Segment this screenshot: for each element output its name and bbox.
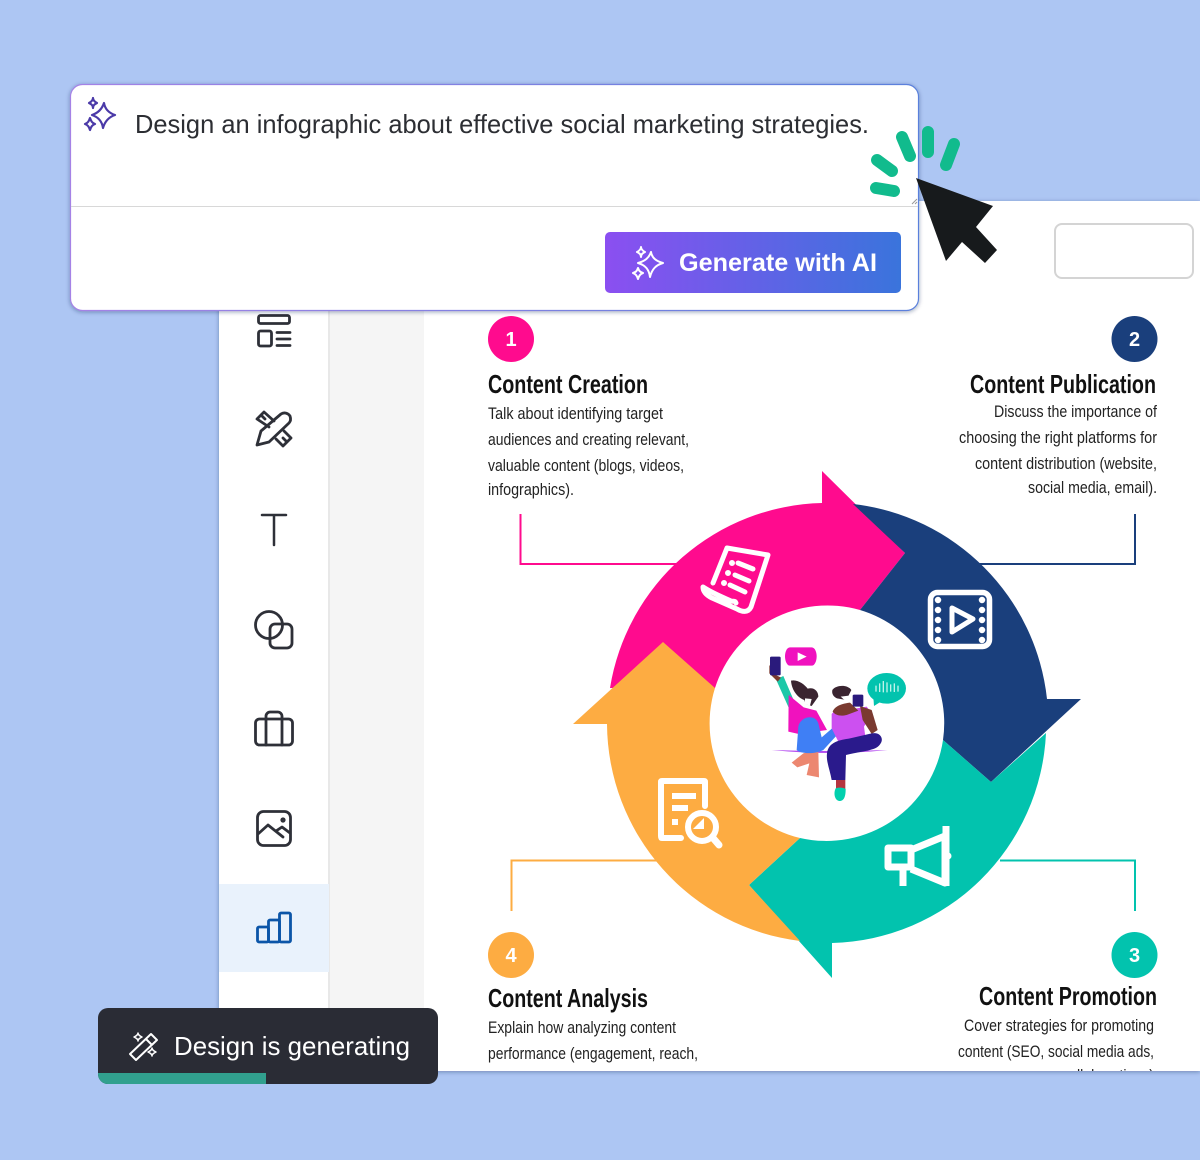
divider	[71, 206, 918, 207]
button: generate with AI	[605, 232, 901, 293]
icon: shapes	[256, 612, 292, 648]
connector: content promotion	[1000, 860, 1135, 911]
text: content analysis description: Explain how analyzing content	[488, 1019, 676, 1037]
text: content promotion description: collaborations)	[1062, 1067, 1154, 1085]
text: content analysis description	[488, 1019, 698, 1063]
base line	[772, 750, 888, 753]
illustration: two friends with phones	[769, 647, 906, 801]
text: content creation description: infographics).	[488, 481, 574, 499]
heading: content analysis: Content Analysis	[488, 983, 648, 1013]
text: content promotion description: Cover strategies for promoting	[964, 1017, 1154, 1035]
heading: content creation: Content Creation	[488, 369, 648, 399]
number badge 2: 2	[1129, 329, 1140, 351]
icon: report magnifier	[661, 781, 719, 845]
text: content publication description: choosing the right platforms for	[959, 429, 1157, 447]
number badge 4	[488, 932, 534, 978]
button label: Generate with AI	[679, 249, 877, 277]
icon: click burst	[876, 132, 954, 191]
number badge 3: 3	[1129, 945, 1140, 967]
icon: text tool	[262, 515, 286, 545]
panel: canvas backdrop	[330, 312, 424, 1008]
text: content creation description: Talk about identifying target	[488, 405, 663, 423]
text: content creation description: valuable content (blogs, videos,	[488, 457, 684, 475]
active sidebar tab	[219, 884, 329, 972]
icon: magic wand	[130, 1033, 157, 1060]
text: content creation description	[488, 405, 689, 499]
icon: pencil and ruler	[257, 412, 291, 446]
number badge 4: 4	[505, 945, 517, 967]
panel: top-right empty button	[1055, 224, 1193, 278]
text: content analysis description: performance (engagement, reach,	[488, 1045, 698, 1063]
text: content publication description: Discuss the importance of	[994, 403, 1157, 421]
segment: content creation arrow	[610, 471, 905, 688]
speech bubble	[867, 673, 906, 706]
segment: content analysis arrow	[573, 642, 800, 941]
text: content promotion description: content (SEO, social media ads,	[958, 1043, 1154, 1061]
step 4: content analysis	[488, 932, 698, 1063]
icon: layout	[258, 316, 290, 346]
text: content promotion description	[958, 1019, 1154, 1071]
step 3: content promotion	[958, 932, 1158, 1085]
text: content publication description: social media, email).	[1028, 479, 1157, 497]
number badge 3	[1112, 932, 1158, 978]
icon: film play	[930, 592, 990, 646]
panel: prompt card	[70, 84, 918, 310]
icon: image	[258, 812, 290, 846]
step 1: content creation	[488, 316, 689, 499]
panel: editor window	[219, 201, 1200, 1085]
panel: generating toast	[98, 1008, 438, 1084]
icon: megaphone	[888, 826, 952, 886]
progress bar	[98, 1073, 266, 1084]
person one	[769, 657, 842, 777]
text: content publication description: content distribution (website,	[975, 455, 1157, 473]
icon: bar chart	[258, 913, 290, 942]
chart: circular arrow cycle	[573, 471, 1081, 978]
resize handle	[912, 199, 917, 204]
number badge 1	[488, 316, 534, 362]
connector: content creation	[520, 514, 680, 564]
sidebar divider	[328, 311, 330, 1008]
number badge 2	[1112, 316, 1158, 362]
play bubble	[785, 647, 817, 666]
segment: content publication arrow	[853, 504, 1081, 782]
text: prompt: Design an infographic about effective social marketing strategies.	[135, 109, 869, 139]
segment: content promotion arrow	[749, 733, 1046, 978]
person two	[827, 686, 882, 801]
connector: content analysis	[512, 860, 660, 911]
text: content publication description	[959, 403, 1157, 497]
icon: cursor arrow	[916, 178, 997, 263]
icon: briefcase	[256, 712, 292, 745]
connector: content publication	[975, 514, 1135, 564]
text: content creation description: audiences and creating relevant,	[488, 431, 689, 449]
icon: button sparkles	[633, 247, 663, 279]
icon: sparkles	[85, 98, 115, 130]
icon: document list	[703, 548, 768, 611]
text: design is generating: Design is generating	[174, 1031, 410, 1061]
number badge 1: 1	[505, 329, 517, 351]
step 2: content publication	[959, 316, 1158, 497]
